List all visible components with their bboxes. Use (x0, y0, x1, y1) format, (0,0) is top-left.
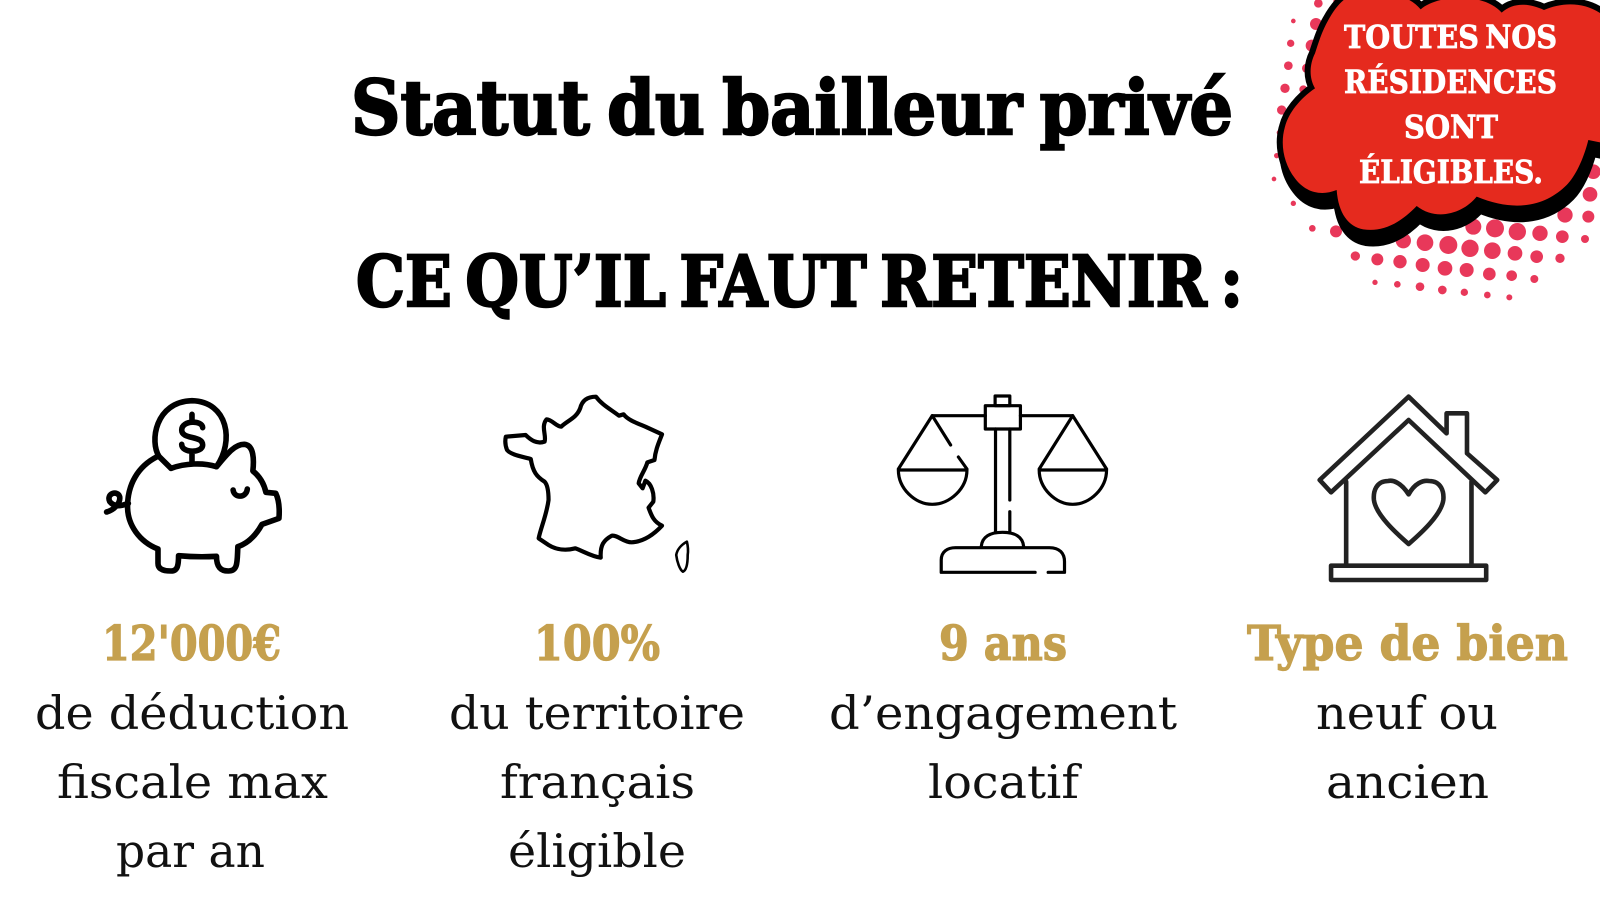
stat description: ancien (1326, 755, 1489, 809)
stat description: français (500, 755, 695, 809)
stat description (449, 686, 745, 878)
stat description (829, 686, 1178, 809)
halftone dots (1272, 0, 1600, 300)
icon: scales (898, 396, 1107, 572)
subtitle: CE QU’IL FAUT RETENIR : (356, 240, 1243, 323)
panel: territory (449, 397, 745, 878)
stat description: neuf ou (1316, 686, 1498, 740)
cloud shape (1283, 0, 1600, 241)
stat value: 12'000€ (102, 616, 281, 672)
callout text: ÉLIGIBLES. (1359, 153, 1543, 191)
stat description: éligible (508, 824, 686, 878)
title: Statut du bailleur privé (351, 64, 1233, 152)
stat description: d’engagement (829, 686, 1178, 740)
panel: property type (1247, 397, 1568, 809)
panel: commitment (829, 396, 1178, 809)
callout: eligible residences badge (1272, 0, 1600, 300)
stat description: fiscale max (57, 755, 328, 809)
icon: map of France (505, 397, 688, 572)
stat description: locatif (928, 755, 1082, 809)
stat description: de déduction (35, 686, 349, 740)
callout text: TOUTES NOS (1344, 18, 1557, 56)
callout text: RÉSIDENCES (1344, 63, 1557, 101)
stat value: 9 ans (939, 616, 1067, 672)
panel: tax deduction (35, 401, 349, 878)
stat description: par an (116, 824, 265, 878)
stat value: 100% (534, 616, 660, 672)
icon: piggy bank (107, 401, 279, 571)
stat value: Type de bien (1247, 616, 1568, 672)
stat description: du territoire (449, 686, 745, 740)
icon: house with heart (1320, 397, 1497, 580)
callout text (1344, 18, 1557, 191)
stat description (1316, 686, 1498, 809)
stat description (35, 686, 349, 878)
callout text: SONT (1404, 108, 1498, 146)
